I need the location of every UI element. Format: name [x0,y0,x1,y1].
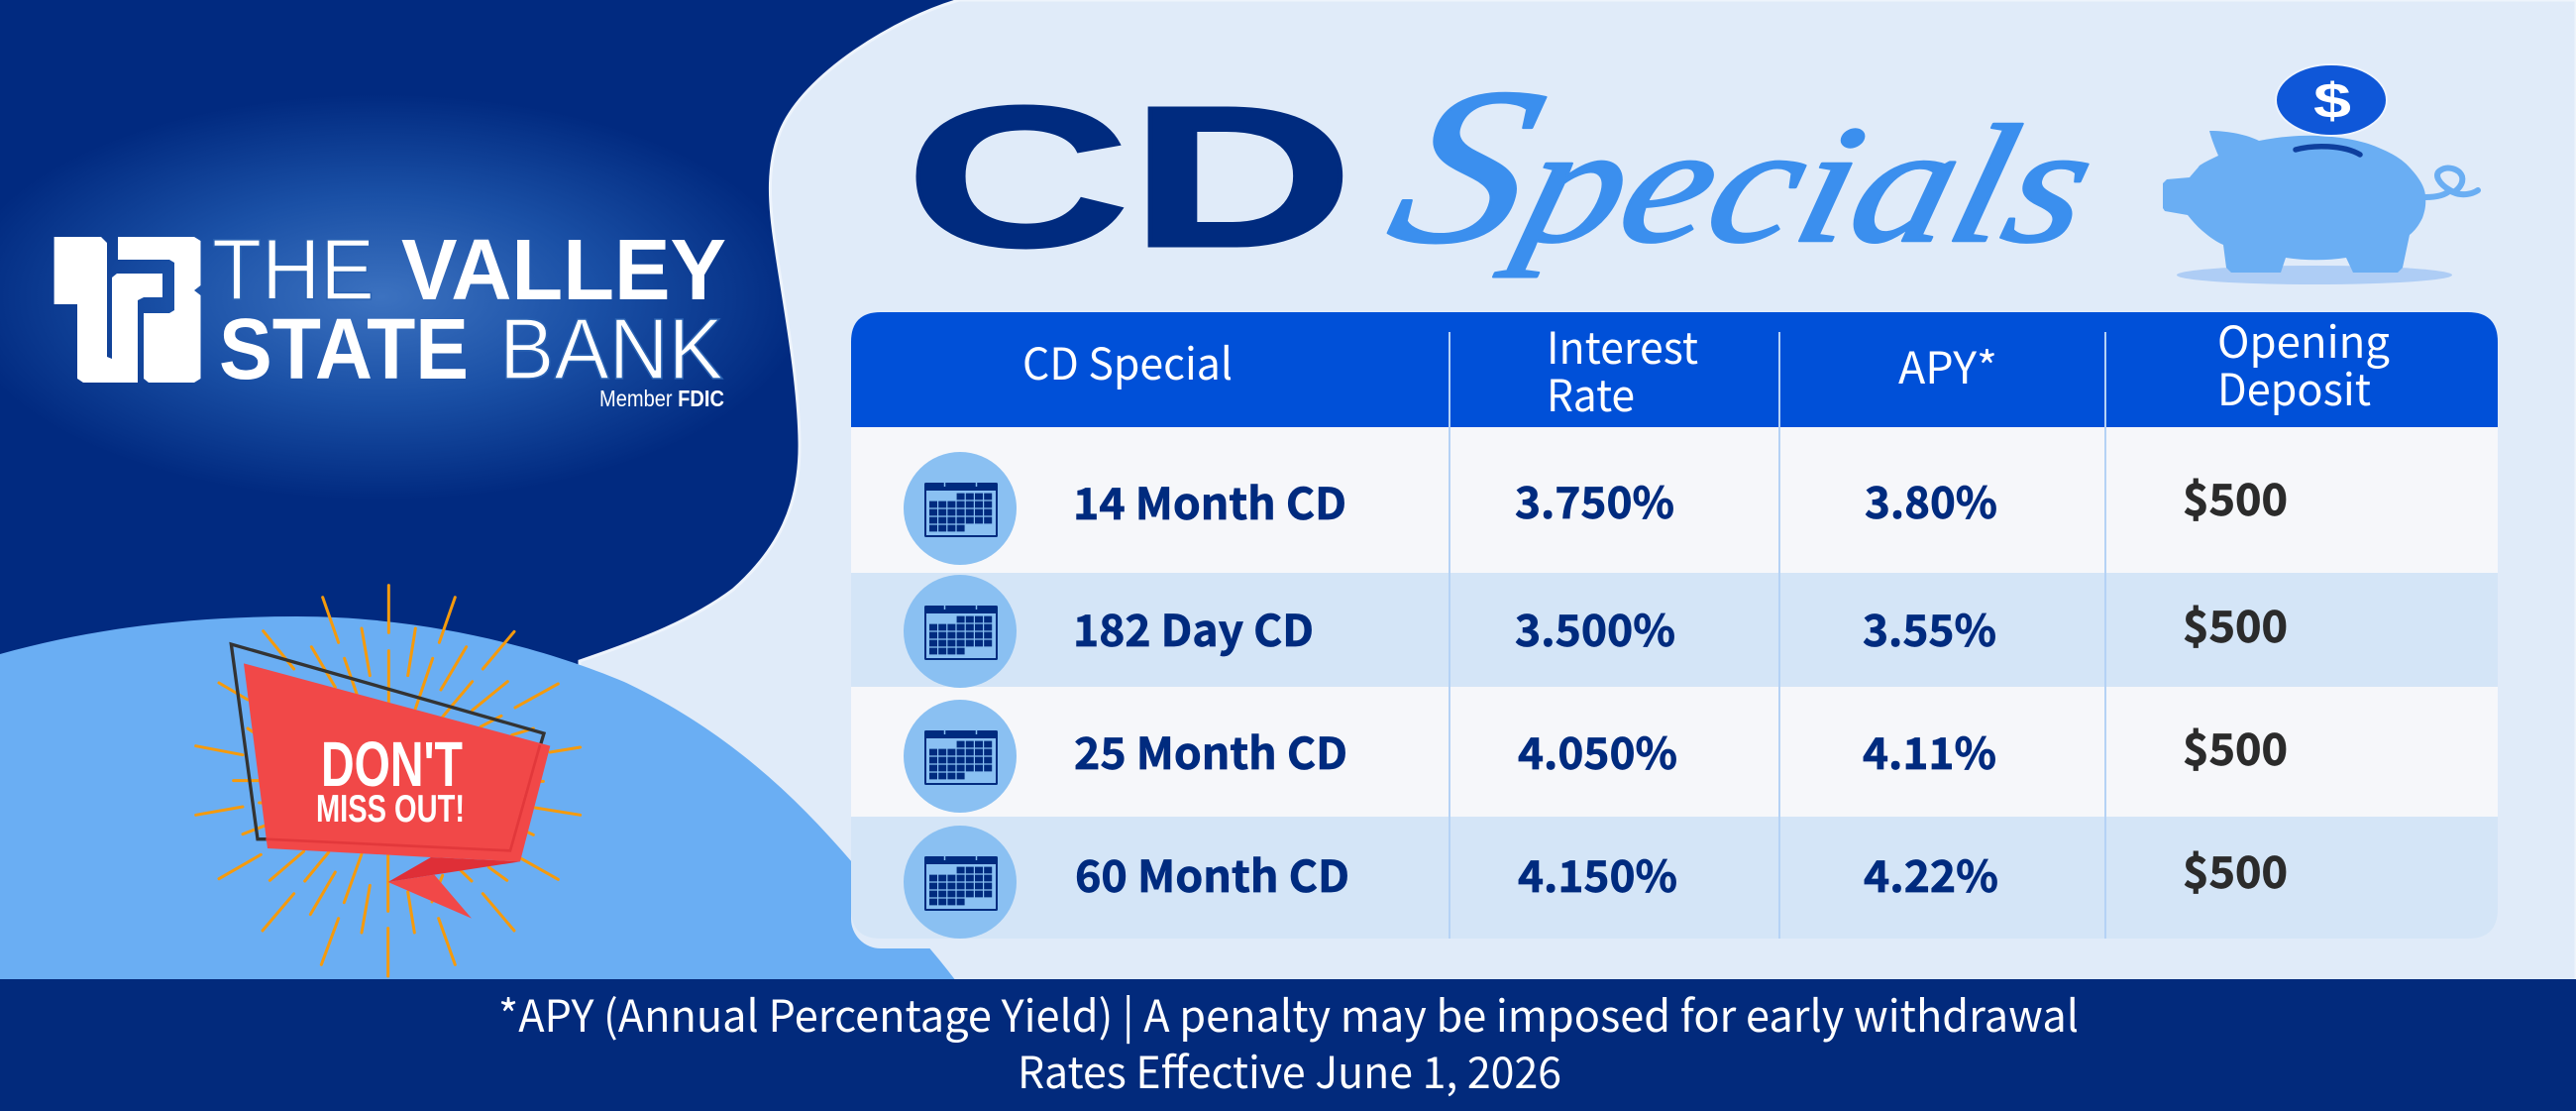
banner text: DON'T [321,728,463,800]
row: 60 Month CD: $500 [2183,837,2288,901]
don't miss out badge [196,586,581,976]
row: 60 Month CD: 60 Month CD [1075,841,1349,905]
row: 60 Month CD: 4.150% [1518,841,1677,905]
row: 25 Month CD: $500 [2183,715,2288,778]
table rows [851,427,2498,573]
row: 14 Month CD [904,452,2288,565]
bank logo [54,222,726,411]
table header [851,312,2498,427]
header labels: Interest [1547,313,1698,377]
light curved panel [580,0,2576,981]
row: 14 Month CD: 3.80% [1865,468,1997,531]
sunburst rays [196,586,581,976]
Specials script heading: Specials [1371,43,2124,289]
row: 25 Month CD: 25 Month CD [1074,719,1347,782]
logo glow [0,50,822,545]
row: 182 Day CD: 3.55% [1863,596,1996,659]
row: 14 Month CD: 14 Month CD [1073,469,1346,532]
light blue hill [0,616,956,981]
header labels: APY* [1898,333,1997,396]
footer bar [0,979,2576,1111]
bank name: THE [212,222,375,318]
row: 60 Month CD [904,826,2288,939]
header labels: Opening [2217,307,2390,371]
row: 182 Day CD: 3.500% [1515,596,1675,659]
bank name: STATE [219,301,469,397]
header labels [1022,307,2390,424]
CD heading: CD [906,64,1353,288]
row: 25 Month CD: 4.050% [1518,719,1677,782]
row: 14 Month CD: 3.750% [1515,468,1674,531]
header labels: Deposit [2217,355,2371,418]
bank name: VALLEY [401,222,726,318]
row: 25 Month CD [904,700,2288,813]
banner shape [231,644,550,919]
footer disclaimer: *APY (Annual Percentage Yield) | A penalty may be imposed for early withdrawal [498,981,2079,1045]
footer date: Rates Effective June 1, 2026 [1018,1038,1561,1101]
bank name [212,222,726,397]
logo mark [54,237,200,383]
row: 182 Day CD: 182 Day CD [1073,596,1314,659]
member FDIC: Member FDIC [599,386,724,411]
row: 182 Day CD: $500 [2183,592,2288,655]
icon: piggy bank with coin: $ [2313,73,2351,129]
banner text: MISS OUT! [316,788,465,831]
table backing halo [851,674,1247,948]
header labels: Rate [1547,361,1635,424]
banner text [316,728,465,831]
bank name: BANK [499,301,723,397]
row: 25 Month CD: 4.11% [1863,719,1996,782]
rates table [851,307,2498,939]
title [906,43,2124,289]
row: 14 Month CD: $500 [2183,465,2288,528]
icon: piggy bank with coin [2163,64,2478,284]
row: 182 Day CD [904,575,2288,688]
row: 60 Month CD: 4.22% [1864,841,1998,905]
header labels: CD Special [1022,329,1233,392]
